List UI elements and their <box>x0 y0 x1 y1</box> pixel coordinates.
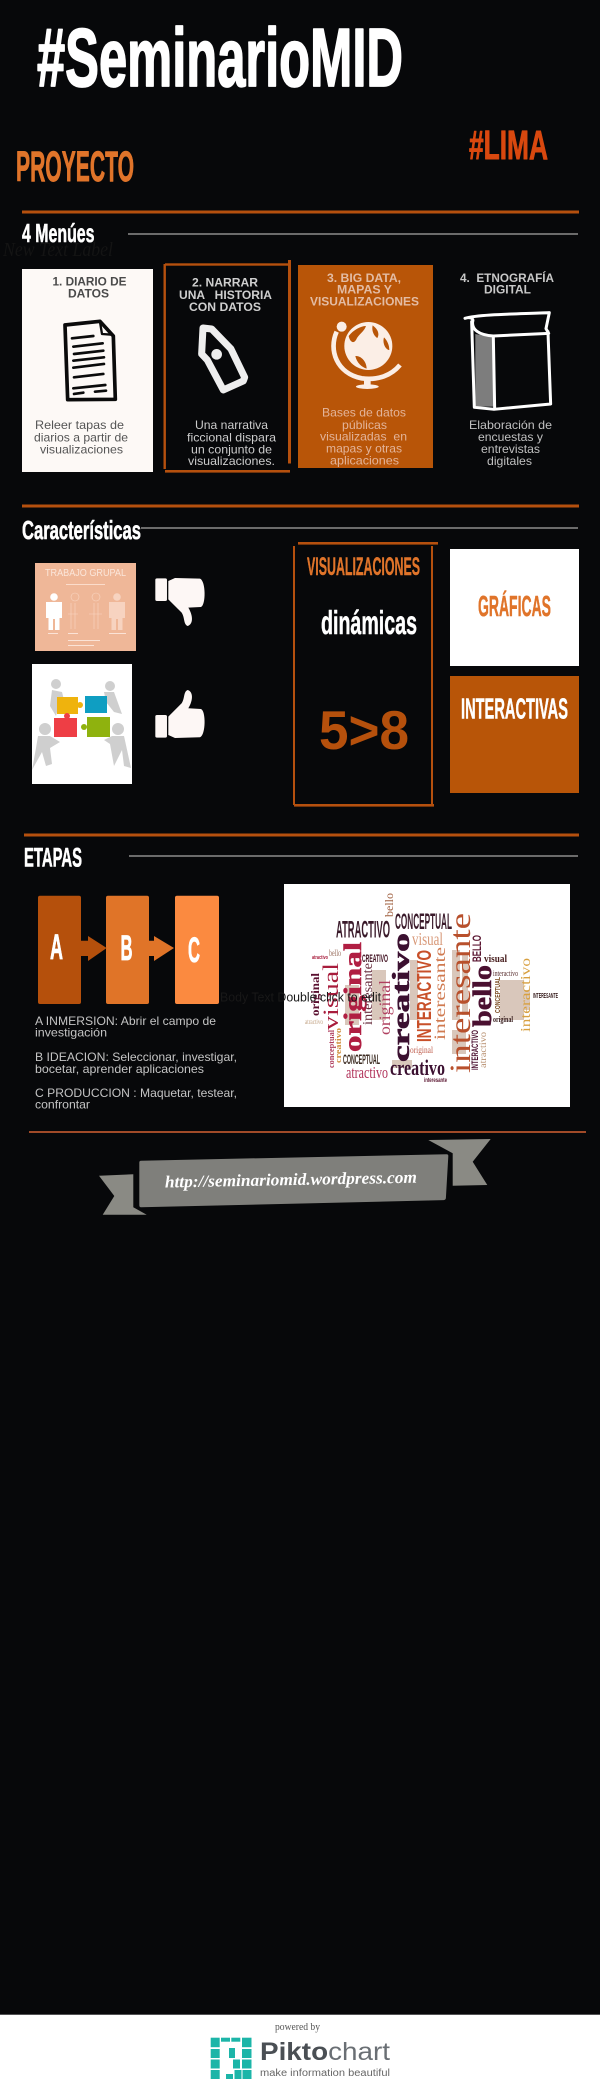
stage descriptions: bocetar, aprender aplicaciones <box>35 1062 204 1076</box>
card 3 body: mapas y otras <box>326 442 402 456</box>
word cloud: interesante <box>361 963 376 1025</box>
word cloud: CONCEPTUAL <box>495 976 502 1013</box>
stage descriptions: B IDEACION: Seleccionar, investigar, <box>35 1050 237 1064</box>
panel: graficas <box>450 549 579 666</box>
word cloud: creativo <box>390 1055 445 1080</box>
placeholder label: New Text Label <box>2 239 113 261</box>
heading: lima: #LIMA <box>469 122 548 168</box>
card 1 heading: 1. DIARIO DE <box>52 275 126 289</box>
card 3 body <box>320 406 407 468</box>
panel: visualizaciones <box>293 542 438 807</box>
stage c: C <box>188 931 200 970</box>
stage descriptions: C PRODUCCION : Maquetar, testear, <box>35 1086 237 1100</box>
icon: thumb down <box>155 578 205 626</box>
icon: globe <box>334 322 400 389</box>
panel: diario de datos <box>22 269 153 472</box>
panel: interactivas <box>450 676 579 793</box>
icon: document <box>65 321 115 400</box>
card 2 body: visualizaciones. <box>188 454 275 468</box>
word cloud: CONCEPTUAL <box>343 1051 380 1067</box>
url text: http://seminariomid.wordpress.com <box>165 1168 417 1191</box>
card 3 heading: 3. BIG DATA, <box>327 271 401 285</box>
word cloud: visual <box>318 963 343 1030</box>
card 3 heading: MAPAS Y <box>337 283 392 297</box>
card 4 heading: DIGITAL <box>484 283 531 297</box>
card 1 body: visualizaciones <box>40 442 123 456</box>
stage c <box>175 896 219 1004</box>
panel: visualizaciones: VISUALIZACIONES <box>307 553 420 581</box>
dinamicas text: dinámicas <box>321 604 417 641</box>
stage descriptions: confrontar <box>35 1098 90 1112</box>
word cloud: original <box>493 1015 514 1024</box>
card 4 body: entrevistas <box>481 442 540 456</box>
card 1 body <box>34 418 128 456</box>
card 3 body: públicas <box>342 418 387 432</box>
card 4 heading <box>460 270 554 297</box>
heading: caracteristicas: Características <box>22 515 141 545</box>
word cloud: original <box>340 942 367 1052</box>
panel: etnografia digital <box>460 270 554 468</box>
ribbon left tail <box>99 1174 147 1215</box>
placeholder body text: Body Text Double click to edit <box>220 990 381 1005</box>
word cloud: original <box>377 979 394 1035</box>
word cloud: creativo <box>334 1028 343 1063</box>
footer: piktochart <box>0 2015 600 2088</box>
icon: thumb up <box>155 690 205 738</box>
stage b: B <box>120 929 132 968</box>
card 1 body: Releer tapas de <box>35 418 124 432</box>
word cloud: interesante <box>444 913 477 1073</box>
stage b <box>106 896 149 1004</box>
card 3 heading: VISUALIZACIONES <box>310 295 419 309</box>
piktochart wordmark: Pikto chart <box>260 2038 390 2066</box>
card 4 body: encuestas y <box>478 430 543 444</box>
word cloud <box>284 884 570 1107</box>
word cloud: visual <box>484 953 507 965</box>
card 4 body: Elaboración de <box>469 418 552 432</box>
word cloud: original <box>410 1045 433 1055</box>
word cloud: interactivo <box>493 969 518 978</box>
word cloud: bello <box>468 965 497 1027</box>
word cloud: creativo <box>389 933 415 1062</box>
card 3 body: aplicaciones <box>330 454 399 468</box>
word cloud: INTERACTIVO <box>414 950 436 1042</box>
word cloud: original <box>308 972 322 1016</box>
card 4 body: digitales <box>487 454 532 468</box>
powered by: powered by <box>275 2022 320 2033</box>
piktochart tagline: make information beautiful <box>260 2068 390 2079</box>
word cloud: bello <box>329 948 341 958</box>
word cloud: CONCEPTUAL <box>395 909 452 934</box>
card 2 heading <box>179 276 272 314</box>
word cloud: atractivo <box>346 1063 388 1082</box>
arrow a to b <box>81 936 107 961</box>
arrow b to c <box>149 936 174 961</box>
piktochart logo mark <box>211 2038 252 2079</box>
card 3 body: Bases de datos <box>322 406 406 420</box>
stage descriptions: investigación <box>35 1026 107 1040</box>
word cloud: BELLO <box>470 935 484 962</box>
image: trabajo grupal <box>35 563 136 651</box>
word cloud: bello <box>382 893 396 917</box>
panel: narrar una historia <box>164 260 291 473</box>
word cloud: interactivo <box>519 958 534 1032</box>
card 3 body: visualizadas en <box>320 430 407 444</box>
ribbon right tail <box>428 1139 491 1186</box>
ribbon body <box>139 1154 448 1207</box>
card 2 body: un conjunto de <box>191 442 272 456</box>
card 2 body: ficcional dispara <box>187 430 276 444</box>
card 2 body <box>187 418 276 468</box>
process diagram: a b c <box>38 896 219 1004</box>
stage descriptions: A INMERSION: Abrir el campo de <box>35 1014 216 1028</box>
image: puzzle team <box>32 664 132 784</box>
card 1 body: diarios a partir de <box>34 430 128 444</box>
word cloud: interesante <box>424 1078 447 1084</box>
card 2 heading: CON DATOS <box>189 300 261 314</box>
card 3 heading <box>310 271 419 309</box>
icon: pen nib <box>202 328 245 390</box>
stage a: A <box>50 928 63 967</box>
card 2 heading: 2. NARRAR <box>192 276 258 290</box>
card 2 heading: UNA HISTORIA <box>179 288 272 302</box>
banner: url ribbon <box>99 1139 491 1215</box>
heading: 4 menues: 4 Menúes <box>22 218 94 248</box>
heading: etapas: ETAPAS <box>24 843 82 873</box>
word cloud: CREATIVO <box>362 953 388 965</box>
card 1 heading: DATOS <box>68 287 109 301</box>
big figure 5>8: 5>8 <box>319 699 409 761</box>
stage a <box>38 896 81 1004</box>
word cloud: INTERACTIVO <box>470 1030 480 1070</box>
word cloud: atractivo <box>312 955 328 961</box>
panel: big data <box>298 265 433 468</box>
word cloud: ATRACTIVO <box>336 917 390 944</box>
card 4 body <box>469 418 552 468</box>
word cloud: atractivo <box>305 1018 323 1026</box>
image: trabajo grupal: TRABAJO GRUPAL <box>45 568 126 579</box>
word cloud: atractivo <box>478 1031 488 1068</box>
card 2 body: Una narrativa <box>195 418 268 432</box>
word cloud: conceptual <box>327 1029 336 1068</box>
word cloud: visual <box>412 929 443 949</box>
card 1 heading <box>52 275 126 301</box>
word cloud: INTERESANTE <box>533 993 558 1000</box>
stage descriptions <box>35 1014 237 1112</box>
infographic canvas: PROYECTO <box>16 143 134 191</box>
word cloud: interesante <box>432 947 449 1040</box>
icon: book <box>465 313 551 409</box>
card 4 heading: 4. ETNOGRAFÍA <box>460 270 554 285</box>
